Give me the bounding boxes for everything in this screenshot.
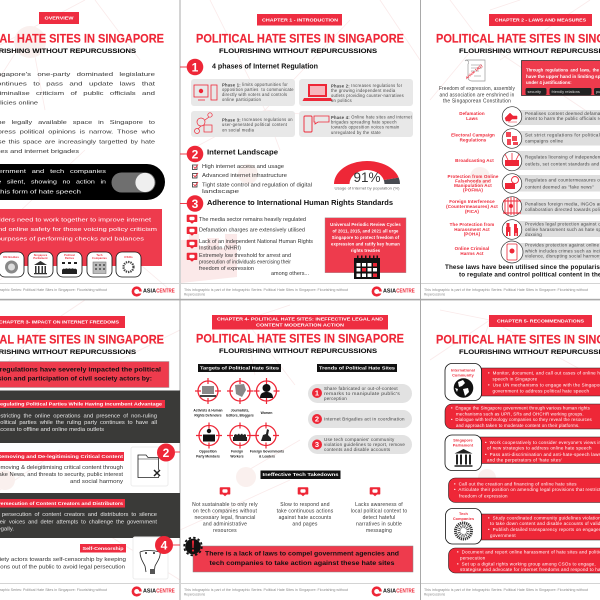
recommendation: engage government: and approach taken to moderate content on their platforms. (456, 423, 580, 428)
captions: targets (193, 408, 284, 459)
list: human rights items: Defamation charges are extensively utilised (199, 228, 305, 234)
recommendation: engage government: mechanisms such as UPR, SRs and OHCHR working groups. (456, 412, 584, 416)
panel: chapter 4 ineffective moderation (184, 315, 415, 596)
captions: targets: Foreign (231, 450, 243, 454)
banner: impact statement (0, 362, 169, 388)
recommendation: call out financing (448, 478, 600, 502)
card: singapore parliament: Singapore (453, 438, 473, 442)
decorative pale circles (0, 26, 496, 490)
callout: universal periodic review: Singapore to protect freedom of (332, 235, 400, 240)
badge: chapter 2: CHAPTER 2 - LAWS AND MEASURES (495, 18, 586, 22)
footer: chapter 1: This infographic is part of the Infographic Series: Political Hate Sites in Singapore: Flourishing without (184, 288, 348, 292)
list: human rights items: prosecution of individuals exercising their (199, 260, 291, 266)
icon row: stakeholders (0, 252, 141, 277)
chart: internet usage gauge: 91% (353, 170, 381, 185)
heading: 4 phases: 4 phases of Internet Regulation (212, 64, 318, 70)
card: phase 2: on politics (331, 98, 352, 103)
footer: chapter 4: This infographic is part of the Infographic Series: Political Hate Sites in Singapore: Flourishing without (184, 588, 348, 592)
list: landscape items: Tight state control and regulation of digital (202, 182, 312, 188)
badge: chapter 1 (257, 14, 342, 26)
card: tech companies: Tech (459, 512, 469, 516)
panel: regulating political parties: political parties while the ruling party continues to have all (0, 420, 157, 426)
row: POHA: (POHA) (464, 232, 481, 236)
icon: CSOs: CSOs (124, 255, 133, 259)
column: lacks awareness: messaging (366, 528, 392, 534)
tags: justifications: friendly relations (552, 89, 580, 94)
row: POFMA: content deemed as "fake news" (525, 184, 594, 190)
row: online criminal harms act: Online Criminal (455, 246, 489, 251)
tag: trends (317, 364, 397, 372)
banner: lack of laws: tech companies to take action against these hate sites (210, 560, 395, 567)
chart: internet usage gauge: Usage of Internet by population (%) (334, 186, 400, 190)
text block: constitution: Freedom of expression, assembly (439, 86, 515, 92)
card: phase 4: brigades spreading hate speech (331, 120, 397, 124)
panel: removing critical content: and social harmony (70, 479, 124, 485)
chart: target reticles (193, 378, 284, 459)
trend 3: 3 (315, 440, 319, 449)
trend 3: violation guidelines to report, remove (324, 442, 405, 447)
card: phase 4: Phase 4: Online hate sites and internet (331, 114, 413, 120)
badge: chapter 5: CHAPTER 5- RECOMMENDATIONS (497, 318, 584, 324)
badge: overview: OVERVIEW (44, 16, 75, 21)
section 3: international standards (180, 195, 406, 279)
text block: legislature (0, 72, 156, 106)
number 2: 2 (192, 147, 199, 161)
column: slow to respond: and pages (292, 522, 318, 528)
card: tech companies: Companies (453, 517, 474, 521)
row: electoral campaign regulations (451, 129, 600, 148)
text block: laws conclusion (445, 264, 600, 278)
icon: journalists (227, 378, 253, 404)
recommendation: international community: government to address political hate speech (492, 388, 589, 394)
row: electoral campaign regulations: Regulations (460, 138, 487, 142)
trend 1: Share fabricated or out-of-context (324, 386, 398, 391)
list: landscape items: landscape (202, 189, 239, 195)
badge: chapter 1: CHAPTER 1 - INTRODUCTION (262, 17, 338, 22)
callout: universal periodic review: Universal Periodic Review Cycles (330, 222, 401, 227)
number 1: 1 (192, 60, 199, 74)
card: international community (445, 364, 482, 400)
number 4 (155, 536, 173, 554)
heading: adherence: Adherence to International Human Rights Standards (207, 200, 393, 207)
callout: silent toggle pill (0, 164, 165, 200)
icon: foreign workers (227, 422, 253, 448)
icon: exclamation badge (184, 538, 202, 555)
icon: activists (195, 378, 221, 404)
trend 2 (308, 410, 412, 428)
list: human rights items (199, 217, 314, 277)
column: slow to respond: against hate accounts (279, 515, 332, 521)
footer: chapter 5 (424, 588, 588, 596)
icon: calendar (354, 256, 380, 279)
recommendation: call out financing: freedom of expression (459, 494, 508, 498)
chart: internet usage gauge (334, 161, 400, 190)
list: trends (308, 384, 412, 454)
logo: Asia Centre: ASIA (143, 288, 156, 294)
badge: chapter 3 (0, 316, 125, 328)
icon: folder card (131, 447, 168, 486)
icon: checkboxes (192, 164, 198, 187)
callout: universal periodic review: of 2011, 2015, and 2021 all urge (332, 228, 399, 233)
heading: chapter 1 title: POLITICAL HATE SITES IN SINGAPORE (196, 32, 404, 46)
recommendation: tech companies: government (490, 533, 516, 538)
recommendation: tech companies (446, 508, 600, 544)
badge: chapter 2 (489, 14, 592, 26)
subheading: chapter 1: FLOURISHING WITHOUT REPURCUSSIONS (219, 48, 378, 55)
footer rules (0, 283, 600, 584)
panel: self-censorship (0, 536, 180, 579)
heading: internet landscape: Internet Landscape (207, 150, 278, 156)
recommendation: engage government: • Engage the Singapore government through various human rights (451, 406, 591, 411)
banner: lack of laws (184, 538, 413, 572)
number 3 (187, 195, 203, 212)
trend 1 (308, 384, 412, 403)
tags: justifications: security (528, 89, 541, 94)
icon: opposition (196, 422, 222, 448)
captions: targets: Editors, Bloggers (226, 414, 254, 418)
icon: Political Parties (57, 252, 82, 277)
footer: chapter 1 (184, 288, 415, 296)
logo: Asia Centre (133, 288, 175, 295)
card: phase 1: online participation (222, 97, 262, 102)
row: FICA: (Countermeasures) Act (446, 204, 498, 209)
trend 1: 1 (315, 389, 319, 398)
decorative skyline (181, 234, 237, 283)
panel: chapter 3 impact on internet freedoms (0, 316, 180, 595)
footer: chapter 4 (184, 588, 415, 596)
column: not sustainable: necessary legal, financial (194, 515, 256, 521)
card: phase 3: on social media (222, 128, 255, 132)
footer: chapter 3 (0, 588, 175, 595)
row: POHA: The Protection from (450, 222, 494, 227)
panel: self-censorship: Self-Censorship (82, 546, 124, 551)
card: tech companies (446, 508, 482, 544)
panel: regulating political parties (0, 390, 180, 443)
icon: toggle switch (112, 172, 156, 192)
logo: Asia Centre: ASIA (383, 588, 396, 594)
callout: universal periodic review: expression and ratify key human (331, 241, 400, 246)
tag: ineffective takedowns: Ineffective Tech Takedowns (262, 472, 339, 477)
badge: chapter 5 (489, 315, 592, 327)
row: broadcasting act: Broadcasting Act (455, 158, 494, 163)
panel: removing critical content (0, 444, 180, 486)
trend 3: Use tech companies' community (324, 437, 395, 442)
card: phase 1 (191, 79, 295, 106)
column: lacks awareness: Lacks awareness of (355, 502, 403, 508)
card: phase 3: Phase 3: Increases regulations on (222, 117, 293, 122)
row: POHA: Harassment Act (454, 227, 490, 232)
recommendation: call out financing: • Articulate their position on amending legal provisions that restrict (454, 487, 600, 492)
footer: chapter 2 (424, 288, 588, 296)
row: online criminal harms act: Harms Act (460, 251, 484, 256)
text block: narrow legal space (0, 120, 155, 155)
logo: Asia Centre (373, 288, 415, 295)
column: not sustainable: resources (213, 528, 237, 534)
footer: chapter 5: This infographic is part of the Infographic Series: Political Hate Sites in Singapore: Flourishing without (424, 588, 588, 592)
card: phase 1: opposition parties to communicate (222, 87, 294, 92)
footer: chapter 4: Repercussions (184, 592, 205, 596)
captions: targets: Rights Defenders (194, 414, 222, 418)
column: slow to respond: Slow to respond and (280, 502, 330, 508)
column: not sustainable: Not sustainable to only rely (192, 502, 258, 508)
captions: targets: Workers (230, 455, 244, 459)
icon: foreign leaders (253, 422, 279, 448)
list: human rights items: Lack of an independent National Human Rights (199, 239, 314, 245)
column: lacks awareness (351, 487, 407, 534)
icon: constitution scroll: Article 14(1) (465, 63, 484, 80)
panel: chapter 2 laws and measures (424, 14, 600, 296)
row: POFMA: Protection from Online (448, 174, 499, 179)
badge: chapter 4: CONTENT MODERATION ACTION (256, 322, 344, 328)
panel: stakeholders call to action (0, 209, 162, 266)
callout: state justifications: under 4 justifications: (526, 80, 572, 85)
number 2 (157, 444, 175, 462)
tag: targets (198, 364, 281, 372)
trend 2: Internet Brigadies act in coordination (324, 416, 405, 422)
icon: Singapore Parliament (28, 252, 53, 277)
badge: overview (39, 12, 79, 24)
subheading: chapter 5: FLOURISHING WITHOUT REPURCUSSIONS (459, 349, 600, 356)
list: human rights items: Institution (NHRI) (199, 246, 241, 252)
logo: Asia Centre: ASIA (143, 588, 156, 594)
logo: Asia Centre: CENTRE (396, 288, 415, 294)
recommendation: singapore parliament: and the perpetrators of 'hate sites' (487, 458, 562, 463)
row: FICA (446, 197, 600, 216)
text block: constitution: and association are enshrined in (440, 92, 515, 98)
recommendation: engage government (445, 404, 600, 429)
card: phase 4: unregulated by the state (331, 130, 381, 135)
panel: chapter 5 recommendations (424, 315, 600, 596)
card: phase 2: Phase 2: Increases regulations for (331, 83, 403, 88)
list: landscape items (202, 164, 312, 195)
icon: Tech Companies: Companies (92, 256, 107, 260)
card: phase 4: towards opposition voices remain (331, 124, 400, 130)
recommendation: civil society: persecution (460, 556, 486, 560)
badge: chapter 3: CHAPTER 3- IMPACT ON INTERNET FREEDOMS (0, 320, 119, 324)
trend 1: remarks to manipulate public's (324, 391, 401, 396)
row: defamation laws: Laws (466, 116, 478, 121)
icon: shush face card (133, 537, 168, 579)
text block: constitution (439, 86, 515, 105)
row: POFMA: (POFMA) (463, 188, 483, 193)
list: human rights items: The media sector remains heavily regulated (199, 217, 306, 223)
icon: Singapore Parliament: Singapore (34, 253, 48, 257)
row: broadcasting act (455, 151, 600, 171)
list: landscape items: High internet access and usage (202, 164, 284, 170)
icon: Political Parties: Political (64, 253, 75, 257)
panel: persecution of creators: Persecution of Content Creators and Distributors (0, 501, 124, 506)
icon: Political Parties: Parties (65, 256, 75, 260)
number 3: 3 (192, 197, 199, 211)
card: singapore parliament (445, 435, 482, 470)
icon: Tech Companies: Tech (96, 253, 103, 257)
row: FICA: Foreign Interference (449, 199, 495, 204)
icons: speech bubbles (187, 215, 197, 262)
row: online criminal harms act (455, 241, 600, 263)
logo: Asia Centre: CENTRE (156, 588, 175, 594)
row: POFMA: Manipulation Act (454, 183, 492, 188)
trend 1: perception (324, 396, 347, 401)
card: phase 2 (299, 79, 413, 106)
column: slow to respond (277, 487, 334, 528)
captions: targets: Foreign Governments (250, 450, 284, 454)
card: international community: Community (452, 374, 475, 378)
number 1 (187, 59, 203, 75)
card: phase 2: the growing independent media (331, 88, 396, 93)
card: phase 1: Phase 1: limits opportunities for (222, 82, 288, 87)
number 2: 2 (163, 446, 170, 460)
row: electoral campaign regulations: campaigns online (525, 138, 564, 144)
column: lacks awareness: detect hateful (363, 515, 395, 521)
recommendation: international community (445, 364, 600, 400)
row: POHA: doxxing (525, 232, 542, 237)
banner: lack of laws: There is a lack of laws to compel government agencies and (205, 550, 399, 557)
icon: UN bodies (0, 252, 24, 277)
list: human rights items: Extremely low threshold for arrest and (199, 253, 291, 259)
card: singapore parliament: Parliament (453, 443, 474, 447)
panel: persecution of creators (0, 493, 180, 538)
row: electoral campaign regulations: Electoral Campaign (451, 132, 495, 138)
heading: chapter 4 title: POLITICAL HATE SITES IN SINGAPORE (196, 332, 404, 346)
row: POFMA (448, 174, 600, 193)
card: phase 4 (299, 111, 413, 137)
tag: trends: Trends of Political Hate Sites (319, 366, 396, 370)
column: not sustainable: and administrative (203, 522, 247, 528)
recommendation: civil society: • Set up a digital rights working group among CSOs to engage, (457, 562, 596, 566)
row: POFMA: Falsehoods and (455, 178, 491, 183)
card: phase 3: user-generated political content (222, 122, 288, 127)
section 2: internet landscape (180, 146, 400, 195)
logo: Asia Centre (133, 588, 175, 595)
recommendation: singapore parliament: of new strategies to address online hate speech (487, 446, 592, 450)
row: defamation laws: Defamation (459, 111, 485, 116)
footer: chapter 1: Repercussions (184, 292, 205, 296)
tag: targets: Targets of Political Hate Sites (200, 366, 280, 370)
list: landscape items: Advanced internet infrastructure (202, 173, 287, 179)
card: phase 2: outlets providing counter-narratives (331, 93, 404, 98)
captions: targets: Women (261, 411, 272, 415)
trend 2: 2 (315, 415, 319, 424)
logo: Asia Centre: ASIA (383, 288, 396, 294)
tags: justifications (526, 88, 600, 95)
icon: Singapore Parliament: Parliament (33, 256, 48, 260)
icon: Tech Companies (87, 252, 112, 277)
captions: targets: Party Members (196, 455, 220, 459)
row: online criminal harms act: violence, disrupting social harmony (525, 254, 600, 258)
callout: universal periodic review: rights treaties (351, 248, 381, 253)
panel: overview (0, 12, 175, 295)
logo: Asia Centre (373, 588, 415, 595)
number 2 (187, 146, 203, 162)
row: POHA (450, 220, 600, 239)
tag: ineffective takedowns (260, 470, 340, 479)
column: lacks awareness: local political context to (351, 509, 407, 515)
recommendation: singapore parliament (445, 435, 600, 470)
footer: chapter 5: Repercussions (424, 592, 445, 596)
recommendation: civil society (448, 548, 600, 573)
badge: chapter 4 (212, 315, 388, 330)
list: human rights items: freedom of expression (199, 266, 254, 272)
callout: state justifications (522, 60, 600, 96)
captions: targets: Journalists, (231, 408, 249, 412)
card: phase 3 (191, 111, 295, 137)
card: phase 1: directly with voters and controls (222, 92, 287, 97)
row: defamation laws (459, 107, 600, 126)
list: human rights items: among others... (271, 271, 309, 277)
footer: overview (0, 288, 175, 295)
trend 3: contents and disable accounts (324, 447, 391, 452)
column: slow to respond: take continuous actions (277, 509, 334, 515)
text block: constitution: the Singaporean Constitution (443, 99, 511, 105)
footer: chapter 2: Repercussions (424, 292, 445, 296)
badge: chapter 4: CHAPTER 4- POLITICAL HATE SITES: INEFFECTIVE LEGAL AND (217, 316, 383, 322)
column: lacks awareness: narratives in subtle (356, 522, 402, 528)
trend 3 (308, 435, 412, 454)
footer: chapter 2: This infographic is part of the Infographic Series: Political Hate Sites in Singapore: Flourishing without (424, 288, 588, 292)
logo: Asia Centre: CENTRE (156, 288, 175, 294)
icon: women (254, 378, 280, 404)
section 1: phases of regulation (180, 59, 413, 137)
subheading: chapter 2: FLOURISHING WITHOUT REPURCUSSIONS (459, 48, 600, 55)
icon: UN bodies: UN Bodies (3, 255, 19, 259)
subheading: chapter 4: FLOURISHING WITHOUT REPURCUSSIONS (219, 348, 378, 355)
captions: targets: & Leaders (259, 455, 275, 459)
captions: targets: Opposition (199, 450, 217, 454)
recommendation: international community: speech in Singapore (492, 376, 538, 382)
recommendation: call out financing: • Call out the creation and financing of online hate sites (454, 482, 577, 486)
captions: targets: Activists & Human (193, 408, 223, 412)
icon: CSOs (116, 252, 141, 277)
number 4: 4 (161, 538, 168, 552)
column: not sustainable: on tech companies without (193, 509, 258, 515)
card: international community: International (451, 368, 475, 372)
column: not sustainable (192, 487, 258, 534)
panel: chapter 1 introduction (180, 14, 415, 296)
recommendation: engage government: • Dialogue with technology companies so they reveal the resources (451, 417, 593, 422)
logo: Asia Centre: CENTRE (396, 588, 415, 594)
row: FICA: (FICA) (465, 209, 479, 214)
callout: universal periodic review (325, 218, 406, 279)
